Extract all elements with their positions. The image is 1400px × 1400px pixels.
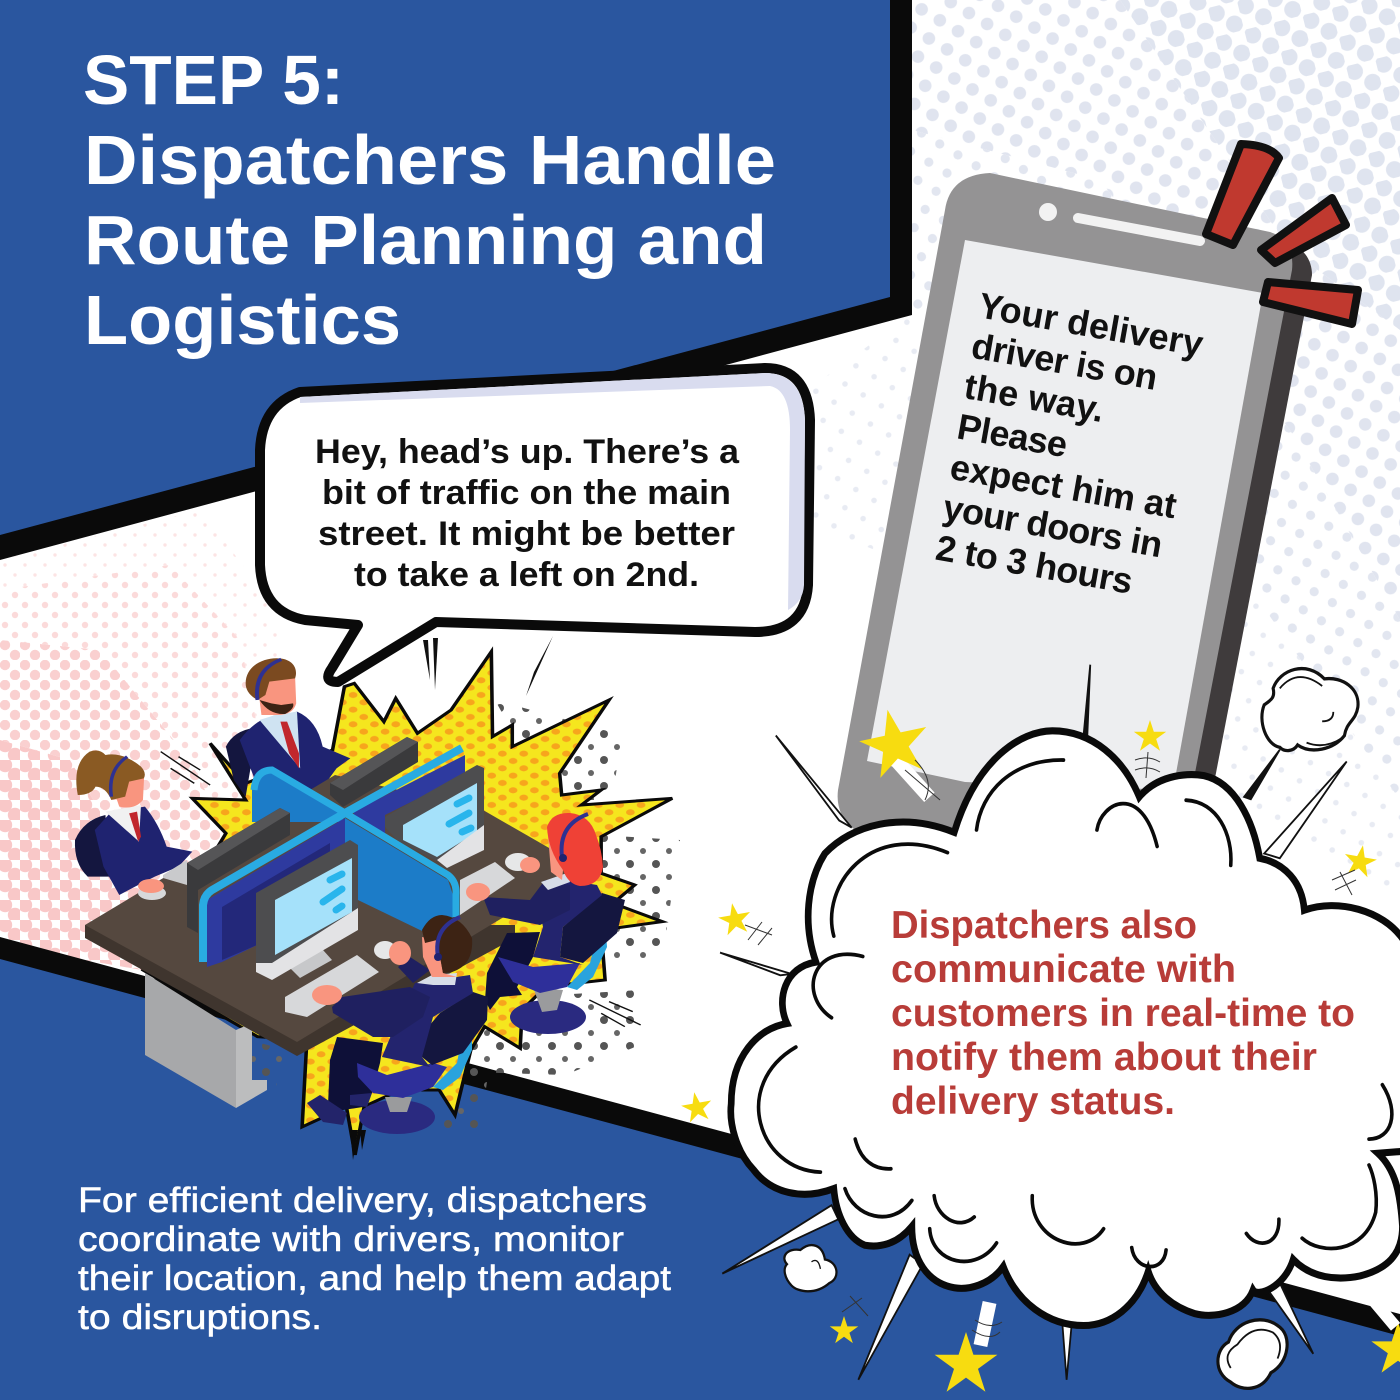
red callout text — [891, 904, 1355, 1123]
cloud inner creases — [759, 760, 1392, 1267]
bottom description text: For efficient delivery, dispatchers — [78, 1181, 647, 1220]
agent: woman with ponytail — [75, 751, 192, 895]
cross divider — [203, 748, 465, 967]
red callout text: communicate with — [891, 948, 1236, 991]
back characters and burst layer — [75, 652, 672, 1155]
bubble text: street. It might be better — [318, 515, 735, 553]
top black band — [0, 0, 912, 560]
back monitor left — [138, 808, 290, 933]
red callout text: notify them about their — [891, 1036, 1317, 1079]
bubble inner shadow — [300, 373, 805, 610]
phone camera — [1039, 203, 1057, 221]
bubble text: to take a left on 2nd. — [354, 556, 699, 594]
cloud outline — [731, 731, 1400, 1326]
bottom description text: to disruptions. — [78, 1298, 322, 1337]
burst accent lines — [423, 636, 553, 696]
small spikes under chair — [350, 1130, 366, 1160]
phone dark side — [1150, 235, 1312, 830]
keyboards and mice — [285, 853, 531, 1017]
agent: man with brown hair — [307, 915, 488, 1134]
top blue panel — [0, 0, 890, 535]
title: Route Planning and — [84, 201, 767, 279]
monitor left — [256, 840, 358, 980]
title: Dispatchers Handle — [84, 121, 776, 199]
alert marks — [1206, 144, 1358, 324]
speech bubble — [260, 368, 810, 682]
phone — [838, 173, 1312, 830]
red callout text: delivery status. — [891, 1080, 1175, 1123]
main divider: left section — [252, 767, 343, 822]
speed lines — [161, 752, 641, 1027]
small cloud on blue right — [1218, 1320, 1287, 1388]
monitor right — [385, 765, 484, 868]
phone message: Your delivery — [976, 285, 1206, 364]
bottom description text: their location, and help them adapt — [78, 1259, 671, 1298]
sparkle wisps — [745, 752, 1356, 1337]
red callout text: customers in real-time to — [891, 992, 1355, 1035]
back monitor right — [330, 737, 418, 807]
title — [83, 41, 776, 359]
phone message: expect him at — [947, 446, 1180, 526]
main divider: right section — [254, 770, 456, 938]
explosion cloud with spikes — [720, 665, 1400, 1388]
title: STEP 5: — [83, 41, 344, 119]
desk — [85, 775, 570, 1108]
bottom description text — [78, 1181, 671, 1337]
agent: woman with red hair — [466, 813, 625, 1034]
phone screen — [867, 240, 1263, 790]
bubble text: bit of traffic on the main — [322, 474, 731, 512]
stars and sparkle bars — [679, 703, 1400, 1392]
bottom blue panel — [0, 959, 1400, 1400]
bottom black band — [0, 937, 1400, 1345]
phone message — [933, 285, 1208, 607]
phone message: Please — [954, 406, 1071, 465]
halftone dots: top right — [780, 0, 1400, 900]
agent: man with beard — [226, 658, 350, 797]
halftone dots: dark around burst — [250, 700, 680, 1130]
phone body — [838, 173, 1292, 830]
bubble text — [315, 433, 740, 594]
illustration: dispatchers at desks with burst — [75, 652, 672, 1160]
phone speaker — [1078, 218, 1200, 241]
phone message: driver is on — [968, 325, 1161, 398]
bottom description text: coordinate with drivers, monitor — [78, 1220, 624, 1259]
halftone dots: left pink — [0, 510, 300, 975]
phone message: the way. — [961, 365, 1107, 430]
spikes — [720, 665, 1347, 1380]
red callout text: Dispatchers also — [891, 904, 1197, 947]
small cloud on blue left — [784, 1245, 836, 1291]
title: Logistics — [84, 281, 401, 359]
comic starburst — [143, 652, 672, 1155]
phone message: 2 to 3 hours — [933, 527, 1136, 602]
bubble text: Hey, head’s up. There’s a — [315, 433, 740, 471]
small cloud top right — [1262, 669, 1358, 751]
phone message: your doors in — [940, 486, 1166, 565]
